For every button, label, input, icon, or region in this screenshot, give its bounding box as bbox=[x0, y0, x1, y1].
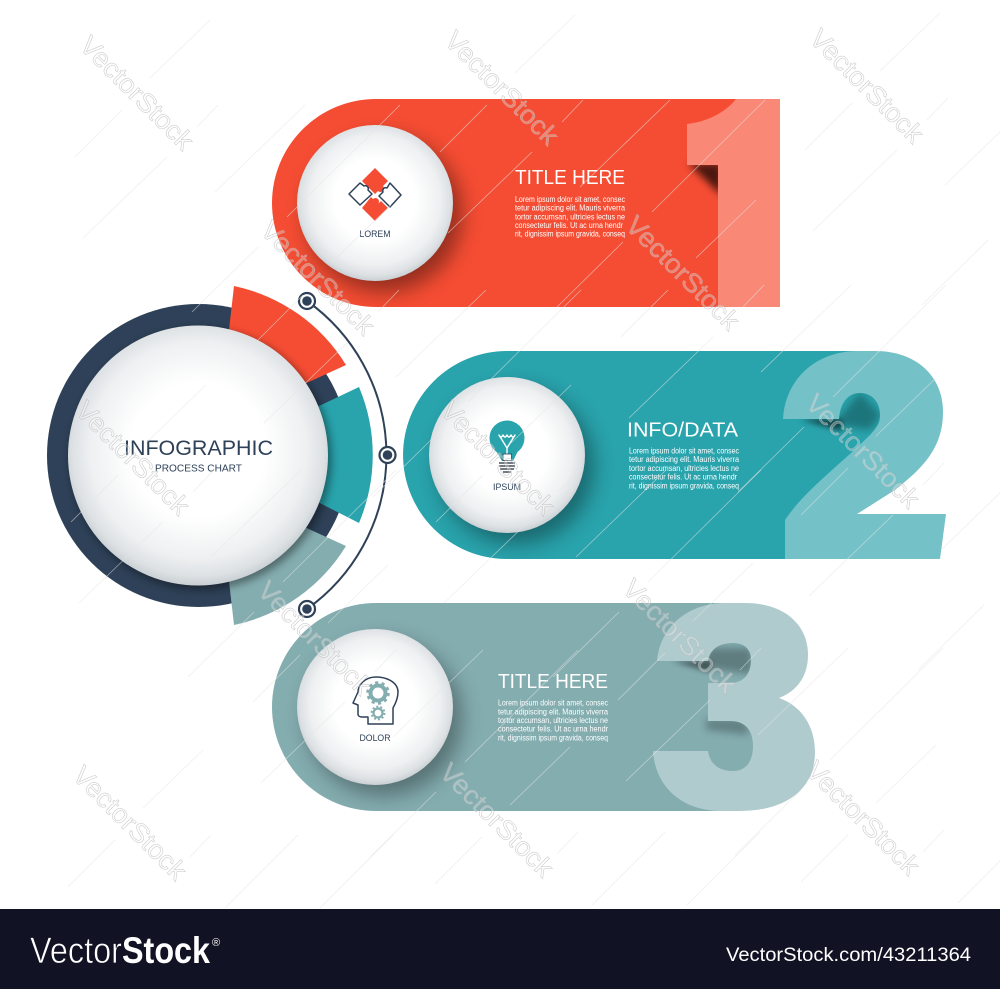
watermarks: VectorStock bbox=[434, 757, 560, 883]
icon: head with gears bbox=[353, 677, 398, 724]
panel 1: red bbox=[272, 99, 780, 307]
body text 2: tortor accumsan, ultricies lectus ne bbox=[629, 464, 739, 473]
body text 1: Lorem ipsum dolor sit amet, consec bbox=[515, 195, 625, 204]
heading: INFOGRAPHIC: INFOGRAPHIC bbox=[124, 436, 273, 460]
icon: puzzle bbox=[349, 168, 401, 221]
body text 2: rit, dignissim ipsum gravida, conseq bbox=[629, 481, 739, 490]
watermarks: VectorStock bbox=[70, 395, 196, 521]
subheading: PROCESS CHART: PROCESS CHART bbox=[155, 462, 243, 474]
footer logo: Vector bbox=[30, 930, 122, 971]
body text 3: rit, dignissim ipsum gravida, conseq bbox=[498, 733, 608, 742]
body text 1: tetur adipiscing elit. Mauris viverra bbox=[515, 204, 626, 213]
central process chart bbox=[47, 286, 373, 625]
body text 3: tortor accumsan, ultricies lectus ne bbox=[498, 716, 608, 725]
watermarks: VectorStock bbox=[439, 25, 565, 151]
body text 2 bbox=[629, 447, 740, 490]
panel 2: teal bbox=[403, 351, 946, 559]
body text 3 bbox=[498, 699, 609, 742]
footer image id: VectorStock.com/43211364 bbox=[726, 945, 971, 966]
body text 1: rit, dignissim ipsum gravida, conseq bbox=[515, 230, 625, 239]
ball 3 bbox=[297, 629, 453, 785]
body text 2: consectetur felis. Ut ac urna hendr bbox=[629, 473, 737, 482]
title 2: INFO/DATA bbox=[627, 418, 738, 442]
body text 2: tetur adipiscing elit. Mauris viverra bbox=[629, 455, 740, 464]
title 3: TITLE HERE bbox=[498, 670, 608, 693]
watermarks: VectorStock bbox=[617, 573, 743, 699]
body text 1: consectetur felis. Ut ac urna hendr bbox=[515, 221, 623, 230]
big number 3 bbox=[653, 603, 815, 811]
panel 3: grey teal bbox=[272, 603, 815, 811]
label: LOREM: LOREM bbox=[360, 229, 390, 239]
label: IPSUM: IPSUM bbox=[493, 482, 521, 492]
navy ring bbox=[47, 304, 350, 607]
body text 3: Lorem ipsum dolor sit amet, consec bbox=[498, 699, 608, 708]
sector: red bbox=[229, 286, 346, 386]
big number 1 bbox=[687, 99, 780, 307]
watermarks: VectorStock bbox=[74, 30, 200, 156]
watermarks bbox=[67, 23, 930, 886]
connector arc with nodes bbox=[299, 293, 396, 617]
footer logo: ® bbox=[212, 937, 220, 949]
watermarks: VectorStock bbox=[620, 210, 746, 336]
watermarks: VectorStock bbox=[67, 760, 193, 886]
body text 3: tetur adipiscing elit. Mauris viverra bbox=[498, 707, 609, 716]
watermarks: VectorStock bbox=[252, 575, 378, 701]
footer bar bbox=[0, 909, 1000, 989]
watermarks: VectorStock bbox=[800, 755, 926, 881]
footer logo: Stock bbox=[122, 930, 210, 971]
watermarks: VectorStock bbox=[804, 23, 930, 149]
watermarks: VectorStock bbox=[800, 388, 926, 514]
title 1: TITLE HERE bbox=[515, 166, 625, 189]
sector: teal bbox=[300, 387, 373, 523]
body text 1 bbox=[515, 195, 626, 239]
label: DOLOR: DOLOR bbox=[360, 733, 391, 743]
body text 1: tortor accumsan, ultricies lectus ne bbox=[515, 212, 625, 221]
footer logo bbox=[30, 930, 220, 971]
watermarks: VectorStock bbox=[255, 215, 381, 341]
icon: light bulb bbox=[490, 420, 524, 472]
main circle bbox=[68, 326, 328, 586]
sector: grey teal bbox=[229, 525, 346, 625]
ball 2 bbox=[429, 377, 585, 533]
ball 1 bbox=[297, 125, 453, 281]
big number 2 bbox=[783, 351, 946, 559]
watermarks: VectorStock bbox=[435, 395, 561, 521]
body text 2: Lorem ipsum dolor sit amet, consec bbox=[629, 447, 739, 456]
body text 3: consectetur felis. Ut ac urna hendr bbox=[498, 725, 608, 734]
